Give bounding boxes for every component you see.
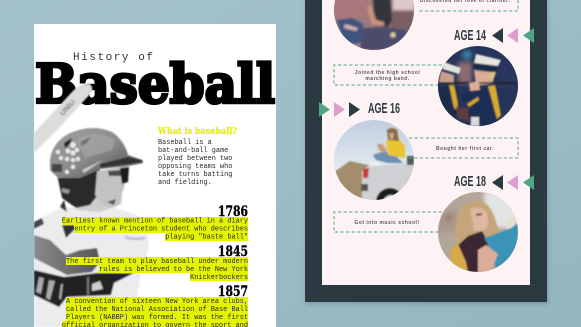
- timeline 1845: 1845: [218, 244, 248, 260]
- photo: marching band: [438, 46, 518, 126]
- timeline 1845: Knickerbockers: [190, 274, 248, 282]
- timeline 1857: [62, 284, 248, 327]
- photo: girl on car: [334, 120, 414, 200]
- label: age 14: [454, 28, 534, 44]
- timeline 1845: rules is believed to be the New York: [99, 266, 248, 274]
- label: age 14: AGE 14: [454, 28, 486, 44]
- dashed callout: marching band: marching band.: [365, 76, 410, 82]
- label: age 16: AGE 16: [368, 101, 400, 117]
- timeline 1786: 1786: [218, 204, 248, 220]
- label: age 18: [454, 174, 534, 190]
- title: Baseball: Baseball: [35, 54, 275, 116]
- player photo: [34, 128, 149, 327]
- timeline 1786: [62, 204, 248, 242]
- text block: definition: bat-and-ball game: [158, 147, 228, 155]
- arrows: age 14: [492, 28, 534, 43]
- bat: UNIU: [58, 98, 77, 117]
- heading: History of: History of: [73, 52, 153, 64]
- photo: clarinet girl: [334, 0, 414, 50]
- text block: definition: take turns batting: [158, 171, 232, 179]
- dashed callout: music school: [334, 212, 442, 232]
- timeline 1857: Players (NABBP) was formed. It was the first: [66, 314, 248, 322]
- text block: definition: and fielding.: [158, 179, 212, 187]
- timeline 1786: playing "baste ball": [165, 234, 248, 242]
- timeline 1857: A convention of sixteen New York area clubs,: [66, 298, 248, 306]
- panel: history of baseball poster: [34, 24, 276, 327]
- text block: definition: [158, 139, 232, 187]
- dashed callout: marching band: Joined the high school: [355, 70, 420, 76]
- timeline 1857: 1857: [218, 284, 248, 300]
- text block: definition: Baseball is a: [158, 139, 212, 147]
- photo: girl reading: [438, 192, 518, 272]
- timeline 1857: called the National Association of Base Ball: [66, 306, 248, 314]
- timeline 1845: [66, 244, 248, 282]
- bat: [34, 84, 92, 153]
- dashed callout: first car: Bought her first car.: [436, 146, 494, 152]
- timeline 1786: Earliest known mention of baseball in a diary: [62, 218, 248, 226]
- dashed callout: music school: Got into music school!: [354, 220, 420, 226]
- arrows: age 18: [492, 175, 534, 190]
- panel: timeline poster: [305, 0, 547, 302]
- dashed callout: first car: [409, 138, 518, 158]
- label: age 18: AGE 18: [454, 174, 486, 190]
- dashed callout: clarinet: [417, 0, 518, 11]
- text block: definition: played between two: [158, 155, 232, 163]
- subheading: What is baseball?: What is baseball?: [157, 127, 237, 137]
- dashed callout: marching band: [334, 65, 442, 85]
- arrows: age 16: [319, 102, 360, 117]
- timeline 1786: entry of a Princeton student who describes: [74, 226, 248, 234]
- text block: definition: opposing teams who: [158, 163, 232, 171]
- poster shadow: [306, 0, 548, 304]
- timeline 1845: The first team to play baseball under modern: [66, 258, 248, 266]
